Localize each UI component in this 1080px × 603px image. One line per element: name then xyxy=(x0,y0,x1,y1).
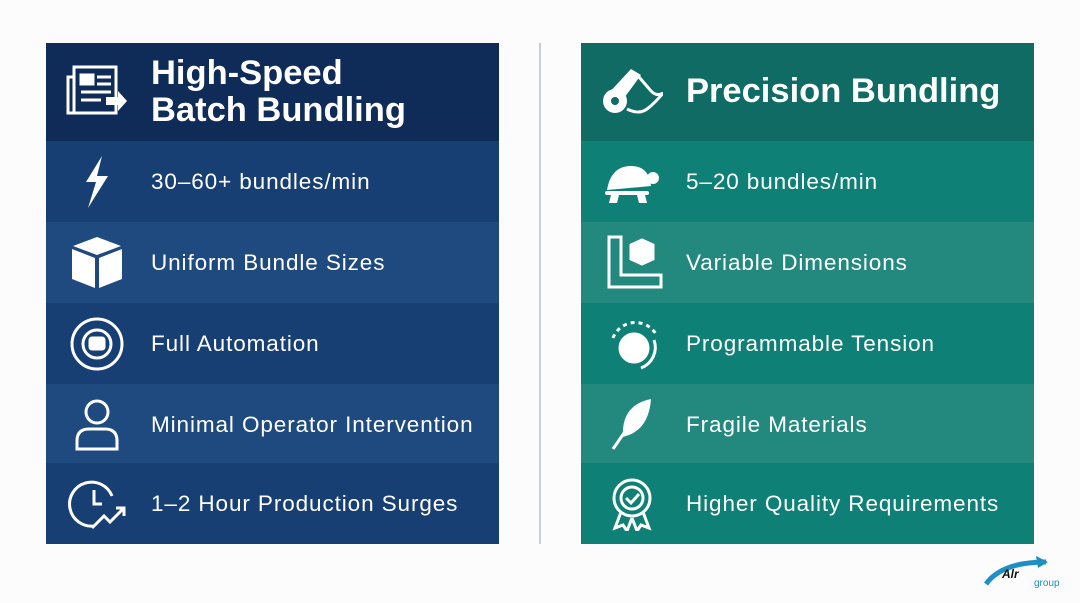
icon: feather xyxy=(612,399,651,450)
row: fragile: Fragile Materials xyxy=(686,412,868,437)
row: dimensions: Variable Dimensions xyxy=(686,250,908,275)
panel: high-speed batch bundling xyxy=(46,43,499,544)
row: tension xyxy=(581,303,1034,384)
logo xyxy=(984,556,1060,589)
icon: turtle xyxy=(605,166,659,203)
row: automation xyxy=(46,303,499,384)
icon: ruler box xyxy=(608,236,662,288)
icon: person xyxy=(76,400,118,450)
row: quality: Higher Quality Requirements xyxy=(686,491,999,516)
row: automation: Full Automation xyxy=(151,331,320,356)
row: surges xyxy=(46,463,499,544)
row: tension: Programmable Tension xyxy=(686,331,935,356)
row: uniform xyxy=(46,222,499,303)
icon: clock chart xyxy=(68,480,126,529)
row: surges: 1–2 Hour Production Surges xyxy=(151,491,458,516)
row: speed: 30–60+ bundles/min xyxy=(151,169,370,194)
logo: Alr xyxy=(1001,567,1020,581)
header: high-speed xyxy=(46,43,499,141)
header: precision xyxy=(581,43,1034,141)
row: dimensions xyxy=(581,222,1034,303)
panel: precision bundling xyxy=(581,43,1034,544)
icon: badge xyxy=(612,478,652,531)
row: fragile xyxy=(581,384,1034,465)
row: quality xyxy=(581,463,1034,544)
row: operator: Minimal Operator Intervention xyxy=(151,412,473,437)
divider xyxy=(539,43,541,544)
icon: gear robot xyxy=(70,318,124,370)
icon: lightning xyxy=(86,156,108,208)
row: operator xyxy=(46,384,499,465)
header: high-speed: Batch Bundling xyxy=(151,91,406,129)
row: speed xyxy=(46,141,499,222)
header: high-speed: High-Speed xyxy=(151,54,343,92)
header: precision: Precision Bundling xyxy=(686,72,1000,110)
icon: box xyxy=(72,237,122,288)
row: uniform: Uniform Bundle Sizes xyxy=(151,250,385,275)
row: speed: 5–20 bundles/min xyxy=(686,169,878,194)
row: speed xyxy=(581,141,1034,222)
icon: document arrow xyxy=(66,66,127,114)
logo: group xyxy=(1034,578,1060,589)
icon: gauge xyxy=(612,321,657,370)
icon: roll xyxy=(603,69,663,114)
